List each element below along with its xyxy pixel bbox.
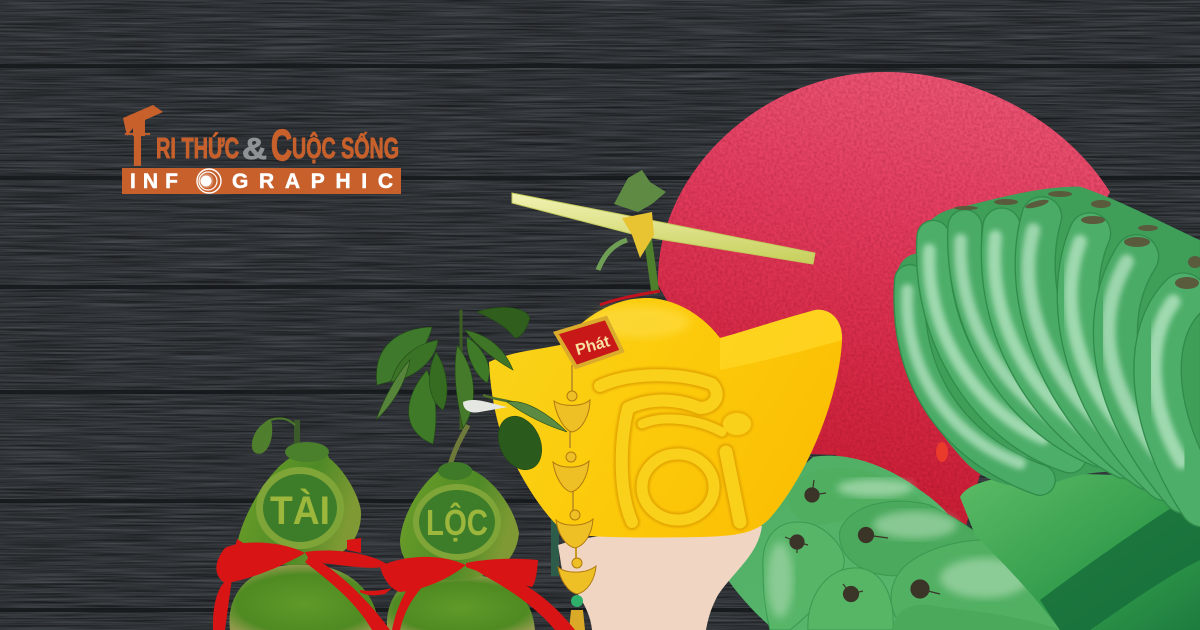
charm glyph: Phát <box>574 333 613 359</box>
infographic banner: O <box>198 170 214 193</box>
red charm with gold chain <box>553 291 660 630</box>
logo wordmark first letter: T <box>125 118 150 177</box>
leafy branch <box>376 307 567 477</box>
logo wordmark: Tri thuc: RI THỨC <box>156 131 239 165</box>
yellow ingot <box>489 298 842 538</box>
banana fingers <box>895 187 1200 503</box>
red pomelo <box>650 70 1120 540</box>
hand holding the ingot <box>551 518 762 630</box>
TAI seal <box>256 467 344 549</box>
banana stem <box>960 474 1200 630</box>
green banana bunch, lower left <box>728 456 1065 630</box>
banana nubs <box>785 480 940 602</box>
infographic banner: GRAPHIC <box>232 170 393 193</box>
red ribbons <box>213 538 575 630</box>
green bead and tassel <box>571 595 583 607</box>
logo mark: roof accent <box>123 105 163 136</box>
LOC seal <box>413 484 501 560</box>
bamboo stick propeller <box>512 170 815 290</box>
logo wordmark: Cuoc song big letter: C <box>271 121 292 170</box>
infographic banner: INF <box>130 170 178 193</box>
logo: Tri thuc & Cuoc song infographic <box>122 105 401 194</box>
embossed Tai character <box>600 375 752 522</box>
LOC seal: LỘC <box>426 501 488 543</box>
infographic banner <box>122 168 401 194</box>
logo wordmark: Cuoc song: UỘC SỐNG <box>292 131 399 165</box>
banana tips <box>763 468 1062 630</box>
banana tips <box>954 191 1200 289</box>
green pomelo with LOC seal <box>387 462 535 630</box>
logo ampersand: & <box>242 131 267 166</box>
TAI seal: TÀI <box>270 488 330 533</box>
green pomelo with TAI seal <box>229 418 379 630</box>
green banana bunch, upper right <box>895 187 1200 630</box>
gold ingot charms <box>553 391 596 594</box>
